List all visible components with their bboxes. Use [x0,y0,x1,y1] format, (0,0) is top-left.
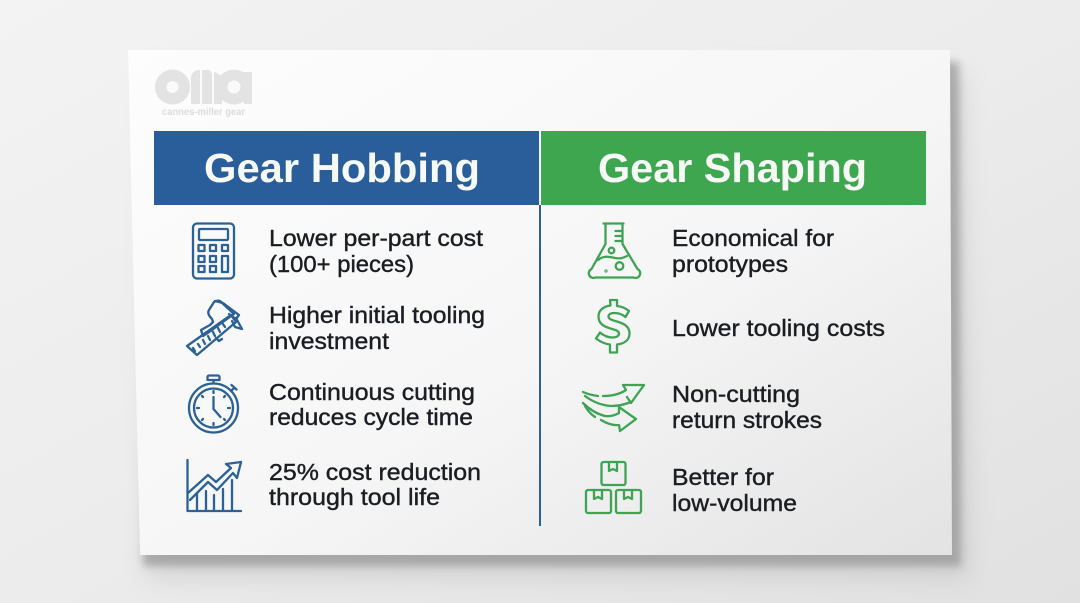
text: 25% cost reduction: 25% cost reduction [269,459,481,485]
text: better for low-volume: Better for [672,464,774,490]
header: Gear Hobbing [154,131,539,205]
text: economical for prototypes: Economical for [672,225,834,251]
text: higher initial tooling: investment [269,328,390,354]
text: economical for prototypes [672,225,834,277]
icon: calculator [193,224,234,278]
text: non-cutting return strokes [672,381,822,433]
panel: card [128,50,952,555]
text: continuous cutting: Continuous cutting [269,379,475,405]
text: continuous cutting: reduces cycle time [269,404,473,430]
header: Gear Shaping: Gear Shaping [598,145,867,191]
text: lower per-part cost: (100+ pieces) [269,251,414,277]
icon: caliper [187,301,242,355]
text: non-cutting return strokes: return strokes [672,407,822,433]
text: 25% cost reduction [269,459,481,510]
text: better for low-volume [672,464,797,516]
text: lower tooling costs: Lower tooling costs [672,315,885,341]
icon: flask [589,224,640,278]
icon: boxes [586,462,641,513]
text: better for low-volume: low-volume [672,490,797,516]
icon: growth chart [188,460,241,511]
text: non-cutting return strokes: Non-cutting [672,381,800,407]
icon: dollar sign [596,300,630,352]
card shadow [143,62,970,578]
icon: stopwatch [189,376,238,432]
text: economical for prototypes: prototypes [672,251,788,277]
text: higher initial tooling: Higher initial tooling [269,302,485,328]
text: 25% cost reduction: through tool life [269,484,440,510]
icon: return arrows [583,385,644,431]
center divider [539,205,541,526]
logo [155,70,252,118]
text: lower per-part cost: Lower per-part cost [269,225,484,251]
header: Gear Shaping [541,131,926,205]
header: Gear Hobbing: Gear Hobbing [204,145,480,191]
text: lower per-part cost [269,225,484,277]
text: continuous cutting [269,379,475,430]
logo: cannes-miller gear [162,107,245,118]
text: higher initial tooling [269,302,485,354]
